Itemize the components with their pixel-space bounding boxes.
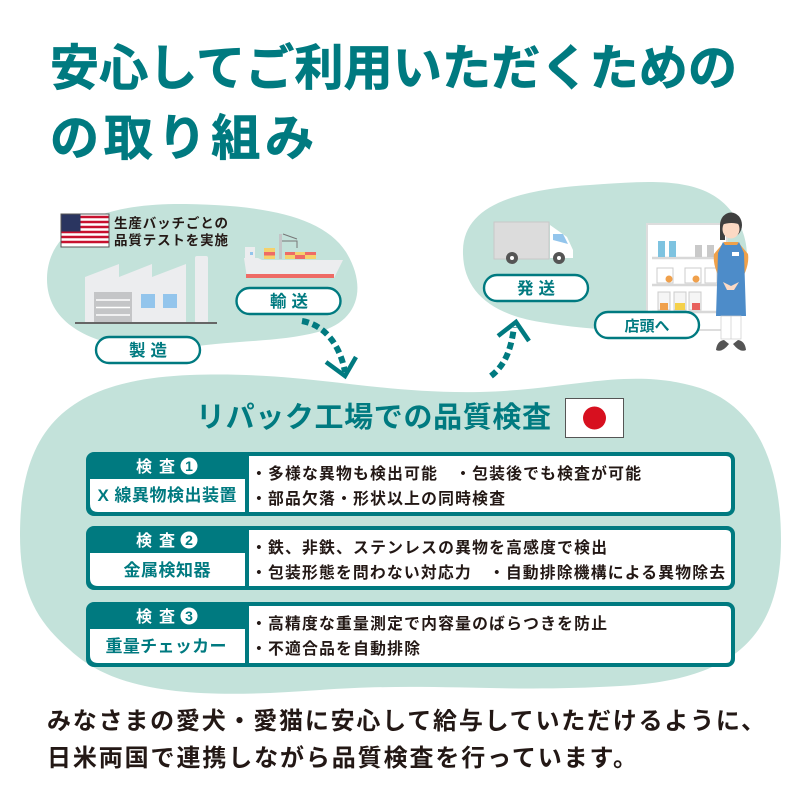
text: lot testing note [114, 215, 228, 248]
row: inspection 2: 2 [185, 532, 193, 548]
icon: store shelf [647, 224, 727, 330]
row: inspection 3: ・不適合品を自動排除 [251, 639, 420, 658]
row: inspection 1 [86, 452, 735, 516]
icon: truck [494, 222, 573, 264]
row: inspection 2 [86, 526, 735, 590]
text: closing message [47, 708, 765, 772]
icon: cargo ship [244, 234, 343, 278]
row: inspection 3: 検 査 [136, 607, 175, 626]
row: inspection 1: X 線異物検出装置 [98, 486, 236, 505]
label: to stores [595, 312, 699, 338]
row: inspection 1: ・多様な異物も検出可能 ・包装後でも検査が可能 [251, 464, 641, 483]
title: 安心してご利用いただくための [50, 42, 737, 96]
row: inspection 1: 検 査 [136, 457, 175, 476]
icon: Japan flag [566, 398, 624, 438]
label: transport [236, 288, 340, 314]
row: inspection 2: 検 査 [136, 531, 175, 550]
row: inspection 2: 金属検知器 [124, 560, 210, 580]
icon: factory [75, 256, 217, 324]
text: closing message: みなさまの愛犬・愛猫に安心して給与していただけるように、 [47, 708, 765, 735]
row: inspection 3 [86, 602, 735, 667]
label: shipping: 発 送 [517, 279, 556, 298]
arrow: to shipping [491, 322, 529, 376]
heading: inspection: リパック工場での品質検査 [196, 401, 551, 434]
text: lot testing note: 生産バッチごとの [114, 215, 228, 231]
row: inspection 2: ・包装形態を問わない対応力 ・自動排除機構による異物除去 [251, 563, 725, 582]
panel: inspection blob [20, 375, 781, 694]
row: inspection 1: ・部品欠落・形状以上の同時検査 [251, 489, 505, 508]
panel: delivery blob [463, 182, 747, 330]
label: manufacturing: 製 造 [129, 341, 168, 360]
label: transport: 輸 送 [270, 292, 308, 311]
row: inspection 1: 1 [185, 458, 193, 474]
row: inspection 3: 3 [185, 608, 193, 624]
panel: manufacturing and shipping blob [47, 204, 357, 349]
label: shipping [484, 275, 588, 301]
label: manufacturing [96, 337, 200, 363]
row: inspection 3: ・高精度な重量測定で内容量のばらつきを防止 [251, 614, 607, 633]
arrow: to inspection [302, 321, 356, 376]
icon: US flag [61, 214, 109, 247]
icon: shop staff [714, 212, 748, 351]
row: inspection 2: ・鉄、非鉄、ステンレスの異物を高感度で検出 [251, 538, 607, 557]
label: to stores: 店頭へ [624, 318, 670, 335]
text: closing message: 日米両国で連携しながら品質検査を行っています。 [47, 744, 637, 772]
title [50, 42, 737, 166]
title: の取り組み [50, 112, 314, 166]
row: inspection 3: 重量チェッカー [106, 637, 226, 656]
text: lot testing note: 品質テストを実施 [114, 232, 228, 248]
